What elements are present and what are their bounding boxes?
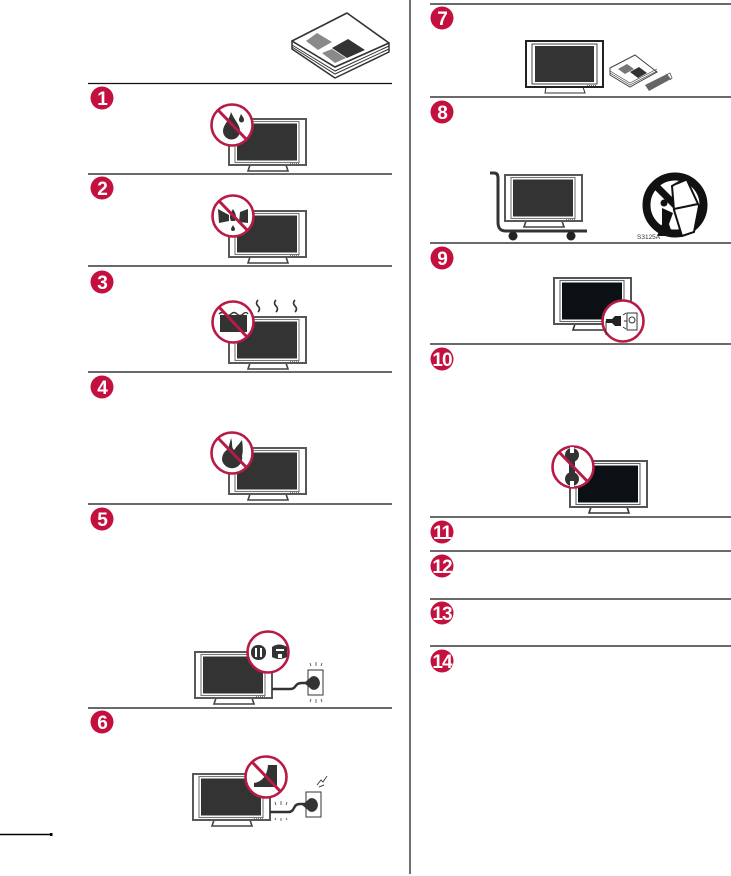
step 9 badge: [430, 246, 454, 270]
step 8 badge: 8: [437, 103, 447, 124]
step 2 badge: 2: [97, 179, 107, 200]
step 11 badge: 11: [433, 523, 452, 544]
step 10 badge: 10: [432, 350, 452, 371]
step 5 badge: 5: [97, 510, 108, 531]
illustration: no heat source: [212, 432, 307, 500]
illustration: do not step on cord: [192, 756, 327, 826]
illustration: no self repair: [552, 446, 648, 513]
step 9 badge: 9: [437, 249, 447, 270]
icon: cart tip-over warning: S3125A: [637, 234, 661, 241]
step 3 badge: 3: [97, 273, 107, 294]
step 14 badge: 14: [432, 652, 453, 673]
step 5 badge: [90, 508, 114, 531]
column divider: [409, 0, 411, 874]
step 7 badge: 7: [437, 9, 447, 30]
illustration: unplug during storms: [553, 277, 644, 342]
step 12 badge: 12: [432, 557, 452, 578]
icon: cart tip-over warning: [637, 176, 704, 241]
step 6 badge: 6: [97, 713, 107, 734]
step 7 badge: [430, 6, 454, 30]
step 3 badge: [90, 270, 114, 294]
step 6 badge: [90, 710, 114, 734]
icon: manual book: [292, 13, 389, 78]
step 1 badge: [90, 86, 114, 110]
step 8 badge: [430, 100, 454, 124]
footer rule: [0, 833, 52, 836]
illustration: TV with accessories: [526, 41, 672, 93]
illustration: no cleaning spray: [212, 196, 307, 263]
illustration: no blocked ventilation: [212, 300, 307, 369]
illustration: TV on cart: [490, 173, 587, 240]
illustration: polarized plug: [194, 632, 323, 704]
step 4 badge: [90, 376, 114, 399]
step 2 badge: [90, 176, 114, 200]
step 1 badge: 1: [97, 89, 108, 110]
illustration: no water: [212, 104, 307, 171]
step 4 badge: 4: [97, 378, 108, 399]
step 13 badge: 13: [432, 604, 452, 625]
